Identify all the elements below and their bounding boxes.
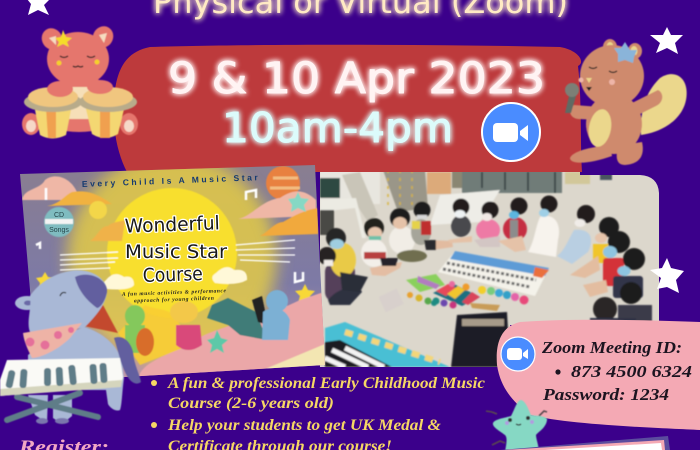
book subtitle: A fun music activities & performance — [121, 288, 227, 298]
icon: star over photo — [650, 258, 684, 293]
bullet list: course benefits — [151, 375, 485, 450]
book subtitle: approach for young children — [134, 296, 214, 304]
course book cover — [20, 165, 325, 378]
zoom details text: Zoom Meeting ID: — [541, 338, 682, 357]
icon: zoom camera large — [482, 103, 540, 161]
photo: children in a music circle — [318, 168, 660, 368]
panel: zoom meeting details — [497, 320, 700, 430]
zoom details text: 873 4500 6324 — [571, 362, 692, 381]
bullet list: course benefits: Course (2-6 years old) — [168, 395, 334, 412]
bottom right register card — [500, 436, 670, 450]
icon: star top right — [650, 27, 683, 54]
time text: 10am-4pm — [222, 104, 453, 152]
bullet list: course benefits: Help your students to get UK Medal & — [167, 417, 441, 434]
character: mint star — [486, 400, 547, 450]
children: seated circle — [318, 196, 652, 326]
zoom details text — [541, 338, 692, 404]
teaching mat — [438, 251, 549, 296]
book title: Course — [142, 263, 203, 287]
bullet list: course benefits: A fun & professional Early Childhood Music — [167, 375, 485, 392]
songs label: Songs — [49, 227, 69, 234]
book title — [124, 212, 227, 287]
book title: Wonderful — [124, 212, 220, 238]
book subtitle — [122, 289, 226, 304]
character: mouse playing keyboard — [0, 270, 141, 424]
sun — [107, 188, 237, 318]
icon: star top left — [27, 0, 50, 15]
CD label: CD — [54, 212, 64, 219]
floor piano mat — [325, 322, 450, 367]
book tagline: Every Child Is A Music Star — [82, 172, 259, 189]
character: squirrel with microphone — [565, 39, 687, 165]
icon: zoom camera small — [501, 337, 535, 371]
book title: Music Star — [125, 241, 227, 263]
instruments: xylophone and bells — [406, 273, 530, 312]
zoom details text: Password: 1234 — [542, 385, 669, 404]
red date banner — [114, 45, 582, 172]
black carry bag — [451, 312, 510, 367]
character: cat with bongos — [22, 22, 138, 138]
date text: 9 & 10 Apr 2023 — [168, 54, 545, 104]
